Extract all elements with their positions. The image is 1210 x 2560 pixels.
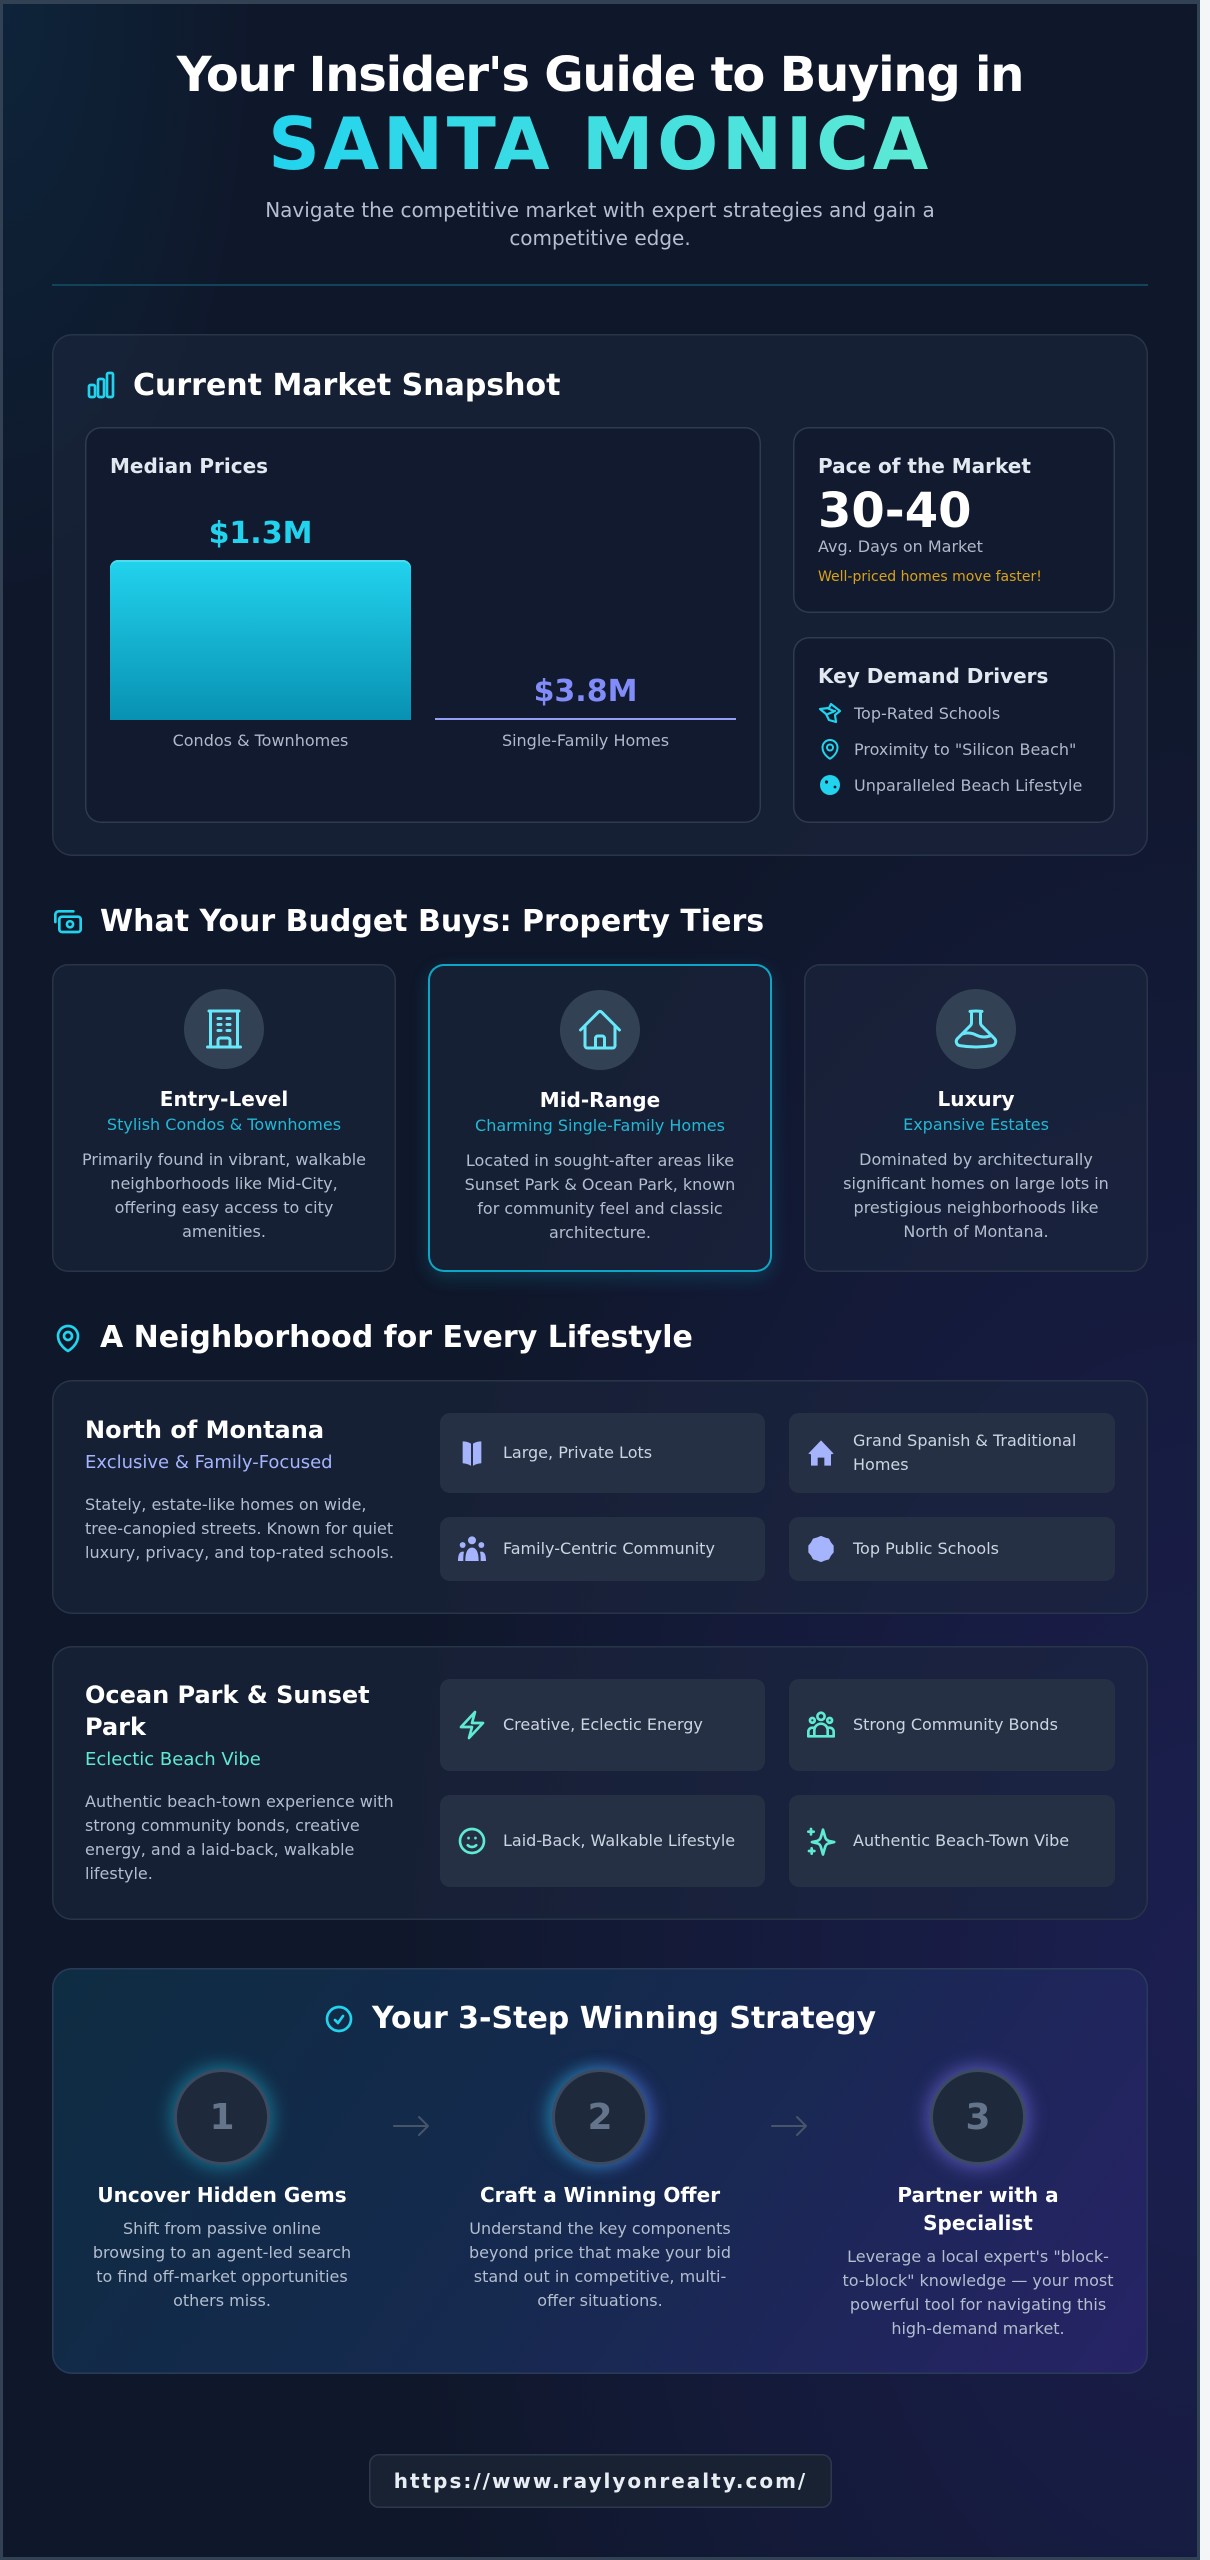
footer url	[369, 2454, 832, 2508]
neighborhood name: North of Montana	[85, 1416, 324, 1444]
step 2 circle: 2	[587, 2097, 613, 2138]
step 3 title: Specialist	[923, 2211, 1033, 2235]
stat: days on market: 30-40	[818, 483, 972, 539]
feature text: Creative, Eclectic Energy	[503, 1715, 703, 1734]
step 3 title	[897, 2183, 1059, 2235]
feature: community bonds	[789, 1679, 1115, 1771]
neighborhood description: strong community bonds, creative	[85, 1816, 360, 1835]
panel: pace of the market	[793, 427, 1115, 613]
card: entry-level	[52, 964, 396, 1272]
icon: budget	[54, 910, 82, 934]
step 3 text: Leverage a local expert's "block-	[847, 2247, 1109, 2266]
tier subtitle: Stylish Condos & Townhomes	[107, 1115, 341, 1134]
panel: current market snapshot	[52, 334, 1148, 856]
panel: key demand drivers	[793, 637, 1115, 823]
note: Well-priced homes move faster!	[818, 569, 1042, 585]
icon circle: house	[560, 990, 640, 1070]
step 1 text: Shift from passive online	[123, 2219, 321, 2238]
step 3 text	[842, 2247, 1114, 2338]
neighborhood description: luxury, privacy, and top-rated schools.	[85, 1543, 394, 1562]
icon: solid house	[808, 1440, 834, 1466]
stat label: Avg. Days on Market	[818, 537, 983, 556]
step 3 text: to-block" knowledge — your most	[842, 2271, 1113, 2290]
step 3 text: powerful tool for navigating this	[850, 2295, 1106, 2314]
tier description: architecture.	[549, 1223, 651, 1242]
feature: grand homes	[789, 1413, 1115, 1493]
subtitle: competitive edge.	[509, 226, 691, 250]
neighborhood tagline: Eclectic Beach Vibe	[85, 1749, 261, 1770]
text: silicon beach: Proximity to "Silicon Beach"	[854, 740, 1076, 759]
feature text: Large, Private Lots	[503, 1443, 652, 1462]
heading: property tiers: What Your Budget Buys: Property Tiers	[100, 904, 764, 939]
step 3 title: Partner with a	[897, 2183, 1059, 2207]
tier subtitle: Expansive Estates	[903, 1115, 1049, 1134]
icon: map pin	[56, 1324, 80, 1352]
subtitle: Navigate the competitive market with expert strategies and gain a	[265, 198, 935, 222]
heading: strategy: Your 3-Step Winning Strategy	[372, 2001, 876, 2036]
heading: neighborhoods: A Neighborhood for Every Lifestyle	[100, 1320, 693, 1355]
feature text: Grand Spanish & Traditional	[853, 1431, 1076, 1450]
tier description: offering easy access to city	[115, 1198, 333, 1217]
tier description: North of Montana.	[903, 1222, 1049, 1241]
tier description: Located in sought-after areas like	[466, 1151, 734, 1170]
header	[176, 47, 1023, 250]
feature: beach-town vibe	[789, 1795, 1115, 1887]
step 2 circle	[552, 2069, 648, 2165]
neighborhood description: Stately, estate-like homes on wide,	[85, 1495, 367, 1514]
icon: family	[458, 1536, 486, 1561]
tier description: Sunset Park & Ocean Park, known	[465, 1175, 735, 1194]
tier description: neighborhoods like Mid-City,	[110, 1174, 338, 1193]
icon: smile	[458, 1828, 486, 1854]
feature text	[853, 1431, 1076, 1474]
panel: north of montana	[52, 1380, 1148, 1614]
arrow 2	[771, 2116, 807, 2136]
median prices heading: Median Prices	[110, 454, 268, 478]
feature: family community	[440, 1517, 765, 1581]
neighborhood description: tree-canopied streets. Known for quiet	[85, 1519, 393, 1538]
step 2 text	[469, 2219, 731, 2310]
step 1 title: Uncover Hidden Gems	[97, 2183, 347, 2207]
bar: condos	[110, 560, 411, 720]
step 1 text: browsing to an agent-led search	[93, 2243, 351, 2262]
icon: bar chart	[88, 372, 114, 398]
icon: check circle	[326, 2006, 352, 2032]
step 1 circle	[174, 2069, 270, 2165]
panel: median prices	[85, 427, 761, 823]
heading: market snapshot: Current Market Snapshot	[133, 368, 560, 403]
step 1 circle: 1	[209, 2097, 235, 2138]
drivers heading: Key Demand Drivers	[818, 664, 1048, 688]
tier description: significant homes on large lots in	[843, 1174, 1109, 1193]
feature text: Strong Community Bonds	[853, 1715, 1058, 1734]
icon circle: building	[184, 989, 264, 1069]
tier description	[82, 1150, 366, 1241]
neighborhood description: Authentic beach-town experience with	[85, 1792, 394, 1811]
neighborhood description	[85, 1495, 394, 1562]
neighborhood description: lifestyle.	[85, 1864, 153, 1883]
step 3 circle	[930, 2069, 1026, 2165]
icon: sparkles	[807, 1828, 836, 1856]
tier description: for community feel and classic	[477, 1199, 723, 1218]
value: condos: $1.3M	[209, 516, 312, 551]
feature: creative energy	[440, 1679, 765, 1771]
step 3 circle: 3	[965, 2097, 991, 2138]
tier title: Mid-Range	[540, 1088, 660, 1112]
neighborhood name: Ocean Park & Sunset	[85, 1681, 370, 1709]
step 2 text: stand out in competitive, multi-	[474, 2267, 726, 2286]
value: single-family: $3.8M	[534, 674, 637, 709]
icon: schools	[818, 702, 842, 724]
title: Santa Monica: SANTA MONICA	[268, 102, 932, 186]
tier description	[465, 1151, 735, 1242]
step 3 text: high-demand market.	[891, 2319, 1065, 2338]
card: mid-range	[428, 964, 772, 1272]
url text: https://www.raylyonrealty.com/	[394, 2469, 807, 2493]
neighborhood description	[85, 1792, 394, 1883]
step 1 text: others miss.	[173, 2291, 271, 2310]
feature: public schools	[789, 1517, 1115, 1581]
feature text: Top Public Schools	[853, 1539, 999, 1558]
icon: beach globe	[820, 775, 840, 795]
neighborhood name	[85, 1681, 370, 1741]
step 2 text: beyond price that make your bid	[469, 2243, 731, 2262]
neighborhood description: energy, and a laid-back, walkable	[85, 1840, 354, 1859]
arrow 1	[393, 2116, 429, 2136]
tier description: amenities.	[182, 1222, 266, 1241]
tier title: Luxury	[937, 1087, 1015, 1111]
text: schools: Top-Rated Schools	[854, 704, 1000, 723]
tier description: Primarily found in vibrant, walkable	[82, 1150, 366, 1169]
feature text: Laid-Back, Walkable Lifestyle	[503, 1831, 735, 1850]
pace heading: Pace of the Market	[818, 454, 1031, 478]
icon: badge	[808, 1536, 834, 1562]
bar: single-family	[435, 718, 736, 720]
label: single-family: Single-Family Homes	[502, 731, 669, 750]
tier title: Entry-Level	[160, 1087, 288, 1111]
neighborhood tagline: Exclusive & Family-Focused	[85, 1452, 333, 1473]
feature text: Authentic Beach-Town Vibe	[853, 1831, 1069, 1850]
feature: large lots	[440, 1413, 765, 1493]
tier subtitle: Charming Single-Family Homes	[475, 1116, 725, 1135]
icon circle: flask	[936, 989, 1016, 1069]
tier description	[843, 1150, 1109, 1241]
neighborhood name: Park	[85, 1713, 146, 1741]
tier description: prestigious neighborhoods like	[854, 1198, 1098, 1217]
panel: ocean park and sunset park	[52, 1646, 1148, 1920]
text: beach lifestyle: Unparalleled Beach Lifestyle	[854, 776, 1082, 795]
icon: bolt	[460, 1710, 484, 1740]
step 1 text: to find off-market opportunities	[96, 2267, 348, 2286]
subtitle	[265, 198, 935, 250]
feature text: Homes	[853, 1455, 909, 1474]
title line: Your Insider's Guide to Buying in	[177, 47, 1023, 103]
step 2 text: offer situations.	[537, 2291, 663, 2310]
icon: group	[807, 1711, 835, 1738]
step 2 title: Craft a Winning Offer	[480, 2183, 720, 2207]
step 2 text: Understand the key components	[469, 2219, 731, 2238]
feature: walkable lifestyle	[440, 1795, 765, 1887]
tier description: Dominated by architecturally	[859, 1150, 1093, 1169]
icon: location	[822, 739, 838, 760]
card: luxury	[804, 964, 1148, 1272]
label: condos: Condos & Townhomes	[173, 731, 348, 750]
feature text: Family-Centric Community	[503, 1539, 715, 1558]
step 1 text	[93, 2219, 351, 2310]
panel: winning strategy	[52, 1968, 1148, 2374]
icon: open book	[462, 1441, 482, 1466]
